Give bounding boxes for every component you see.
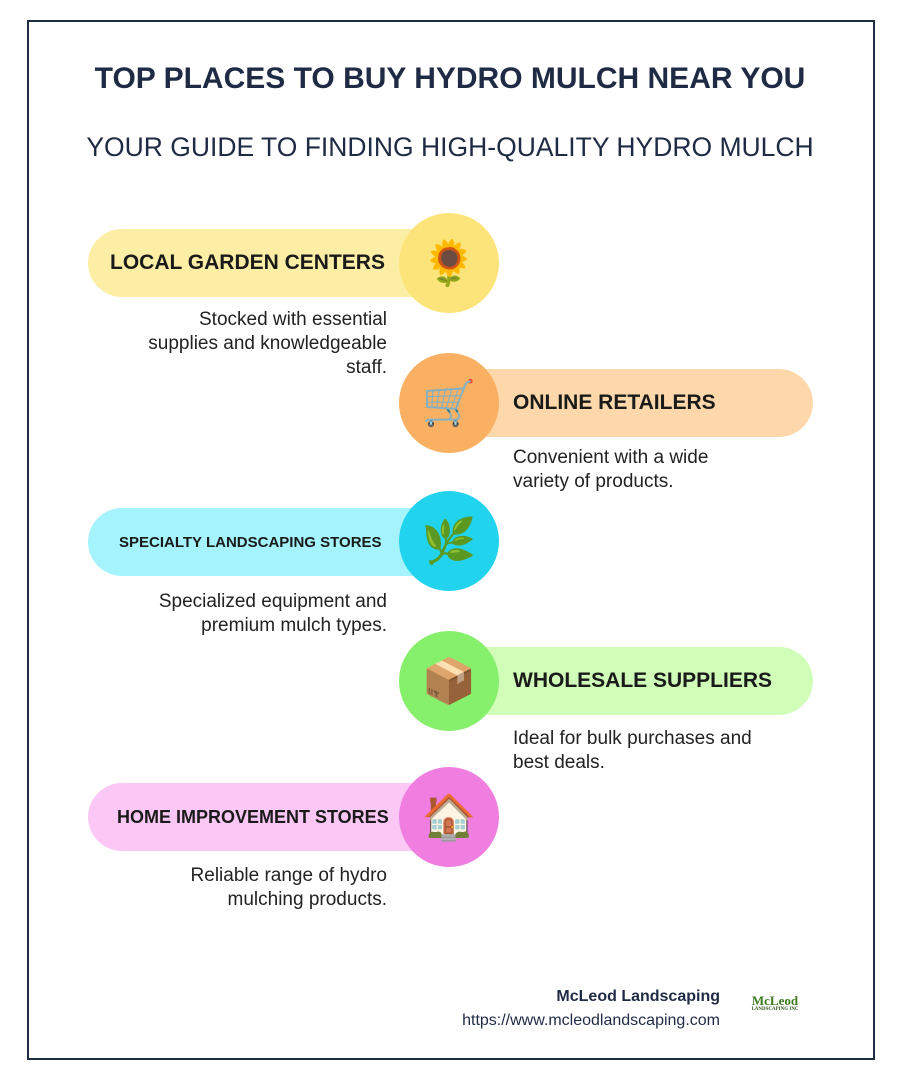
- icon: sunflower: [399, 213, 499, 313]
- icon: herb: 🌿: [422, 517, 476, 566]
- footer: company: [462, 988, 720, 1029]
- icon: package: 📦: [422, 657, 476, 706]
- description: Stocked with essential supplies and knowledgeable staff.: [148, 309, 387, 378]
- footer: company: McLeod Landscaping: [556, 988, 720, 1005]
- description: Convenient with a wide variety of products.: [513, 447, 708, 492]
- pill label: HOME IMPROVEMENT STORES: [117, 806, 389, 826]
- footer: company: https://www.mcleodlandscaping.com: [462, 1012, 720, 1029]
- pill label: SPECIALTY LANDSCAPING STORES: [119, 534, 382, 550]
- pill label: [88, 783, 468, 851]
- pill label: [88, 508, 468, 576]
- icon: herb: [399, 491, 499, 591]
- icon: house: 🏠: [422, 793, 476, 842]
- pill label: ONLINE RETAILERS: [513, 391, 716, 414]
- logo: LANDSCAPING INC: [751, 1007, 799, 1012]
- icon: package: [399, 631, 499, 731]
- icon: cart: [399, 353, 499, 453]
- icon: house: [399, 767, 499, 867]
- icon: sunflower: 🌻: [422, 239, 476, 288]
- pill label: [439, 369, 813, 437]
- description: Specialized equipment and premium mulch types.: [159, 591, 387, 636]
- item: local garden centers: [88, 213, 499, 378]
- item: online retailers: [399, 353, 813, 492]
- description: Ideal for bulk purchases and best deals.: [513, 728, 752, 773]
- item: wholesale suppliers: [399, 631, 813, 773]
- icon: cart: 🛒: [422, 379, 476, 428]
- item: home improvement stores: [88, 767, 499, 910]
- description: Reliable range of hydro mulching products.: [191, 865, 387, 910]
- title: TOP PLACES TO BUY HYDRO MULCH NEAR YOU: [95, 62, 805, 95]
- pill label: WHOLESALE SUPPLIERS: [513, 669, 772, 692]
- pill label: [439, 647, 813, 715]
- pill label: LOCAL GARDEN CENTERS: [110, 251, 385, 274]
- pill label: [88, 229, 468, 297]
- subtitle: YOUR GUIDE TO FINDING HIGH-QUALITY HYDRO MULCH: [86, 132, 814, 162]
- logo: McLeod: [752, 993, 798, 1008]
- item: specialty landscaping stores: [88, 491, 499, 636]
